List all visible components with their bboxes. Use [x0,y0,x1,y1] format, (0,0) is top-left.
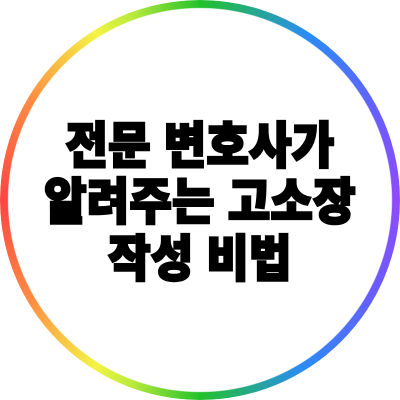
title line 2: 알려주는 고소장 [44,174,356,230]
title line 1: 전문 변호사가 [66,118,334,174]
title line 3: 작성 비법 [108,231,292,287]
